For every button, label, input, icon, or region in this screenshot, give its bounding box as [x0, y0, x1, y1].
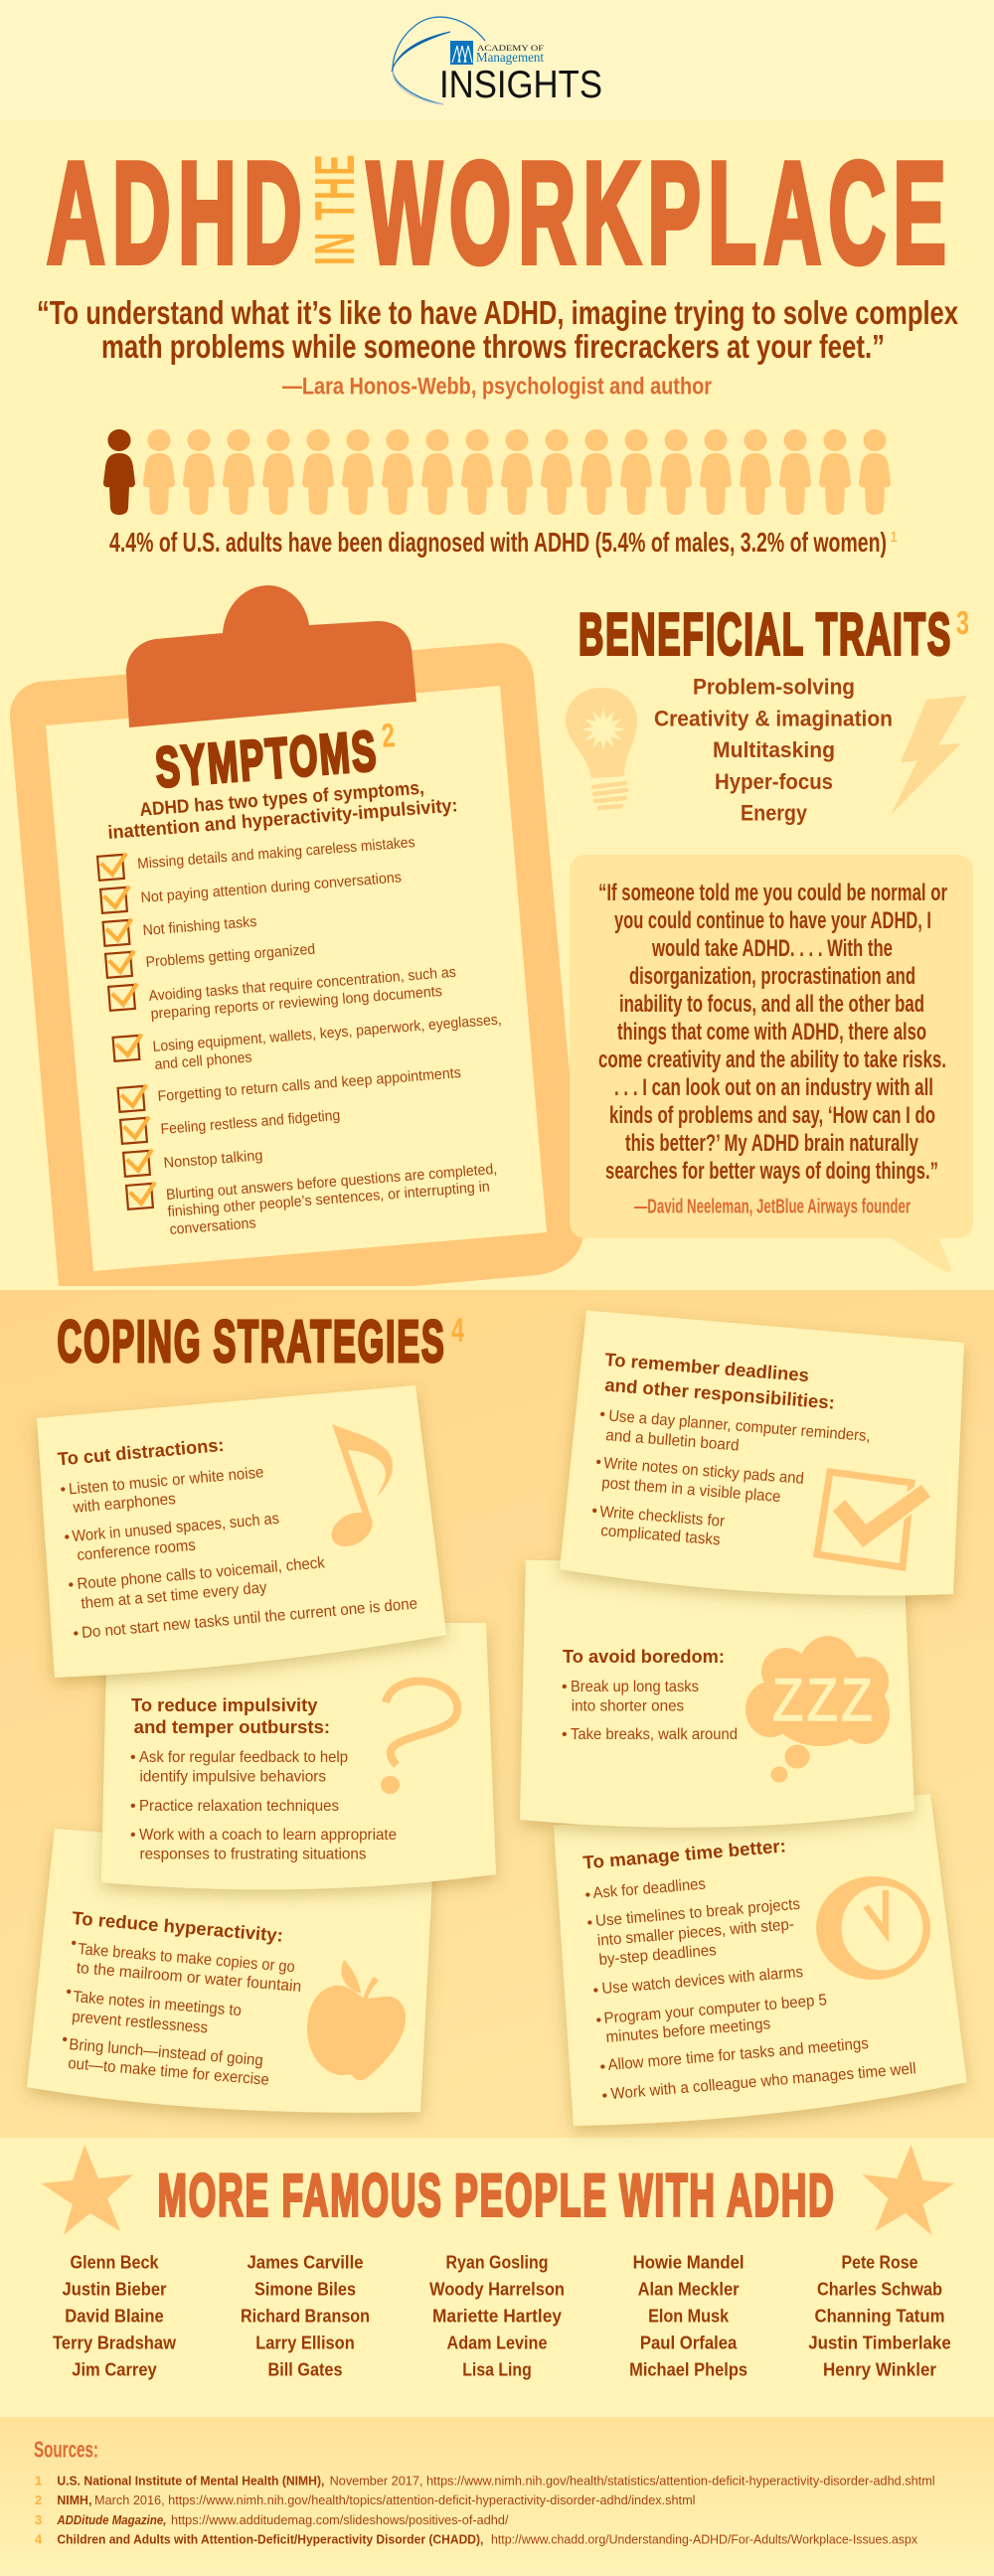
note: reduce impulsivity	[101, 1623, 496, 1889]
note: cut distractions: conference rooms	[77, 1537, 196, 1564]
section: coping strategies	[0, 1290, 994, 2138]
note: avoid boredom	[520, 1560, 914, 1828]
note: remember deadlines: •	[595, 1454, 602, 1471]
note: manage time: Work with a colleague who manages time well	[610, 2060, 916, 2103]
traits list: Problem-solving	[693, 674, 855, 700]
symptoms list: Blurting out answers before questions are completed,	[165, 1161, 498, 1204]
note: cut distractions	[37, 1385, 446, 1678]
source 1: U.S. National Institute of Mental Health (NIMH),	[57, 2474, 324, 2489]
icon: thought cloud	[746, 1636, 890, 1783]
traits list: Hyper-focus	[715, 769, 833, 794]
note: manage time: Use timelines to break projects	[594, 1896, 801, 1930]
title: ADHD in the workplace	[47, 132, 953, 293]
note: reduce hyperactivity: To reduce hyperactivity:	[72, 1907, 284, 1946]
source 4	[35, 2532, 917, 2547]
note: reduce impulsivity: Practice relaxation techniques	[139, 1798, 339, 1815]
note: manage time: •	[601, 2088, 608, 2105]
note: manage time: Use watch devices with alarms	[601, 1964, 804, 1998]
names column 1: Terry Bradshaw	[53, 2334, 177, 2353]
note: manage time: Program your computer to beep 5	[603, 1992, 828, 2027]
quote attribution: —Lara Honos-Webb, psychologist and author	[282, 374, 712, 400]
source 2: NIMH,	[57, 2493, 91, 2507]
names column 4	[629, 2253, 747, 2380]
icon: lightning bolt	[891, 696, 967, 815]
symptoms list: and cell phones	[154, 1048, 252, 1073]
names column 1: David Blaine	[65, 2307, 164, 2327]
names column 2	[241, 2253, 370, 2380]
note: remember deadlines: post them in a visible place	[601, 1475, 781, 1506]
note: remember deadlines: and other responsibilities:	[604, 1374, 836, 1413]
names column 5: Charles Schwab	[817, 2280, 942, 2300]
note: cut distractions: them at a set time every day	[81, 1579, 267, 1612]
source 4: http://www.chadd.org/Understanding-ADHD/For-Adults/Workplace-Issues.aspx	[491, 2532, 917, 2547]
note: remember deadlines: •	[591, 1503, 598, 1520]
note: reduce hyperactivity: •	[62, 2031, 69, 2048]
heading: symptoms: 2	[381, 717, 397, 755]
note: manage time: by-step deadlines	[598, 1942, 717, 1969]
icon: large checkbox	[817, 1472, 930, 1567]
heading: coping strategies	[58, 1309, 464, 1374]
logo: Academy of Management Insights: INSIGHTS	[439, 64, 602, 106]
note: remember deadlines: To remember deadlines	[604, 1349, 810, 1385]
heading: symptoms: SYMPTOMS	[153, 720, 380, 800]
symptoms list	[137, 834, 502, 1238]
note: manage time: Ask for deadlines	[592, 1876, 706, 1902]
note: reduce hyperactivity: out—to make time for exercise	[68, 2055, 269, 2089]
title: ADHD in the workplace: ADHD	[47, 132, 309, 293]
note: manage time: •	[584, 1887, 591, 1904]
source 4: 4	[35, 2532, 43, 2547]
note: manage time: into smaller pieces, with step-	[596, 1916, 795, 1950]
note: manage time: •	[595, 2012, 602, 2029]
symptoms list: Losing equipment, wallets, keys, paperwork, eyeglasses,	[152, 1011, 502, 1055]
names column 5: Henry Winkler	[823, 2360, 936, 2380]
icon: left star	[42, 2145, 133, 2235]
traits list	[654, 674, 893, 825]
note: manage time: •	[586, 1915, 593, 1932]
note: reduce hyperactivity: prevent restlessness	[72, 2009, 209, 2036]
symptoms list: Not paying attention during conversations	[140, 869, 403, 906]
traits list: Multitasking	[713, 737, 835, 762]
note: cut distractions: Work in unused spaces, such as	[72, 1511, 280, 1545]
note: remember deadlines: and a bulletin board	[605, 1427, 740, 1455]
source 2: March 2016, https://www.nimh.nih.gov/health/topics/attention-deficit-hyperactivity-disorder-adhd/index.shtml	[94, 2493, 696, 2507]
source 3: 3	[35, 2512, 42, 2527]
note: reduce impulsivity: •	[130, 1749, 136, 1766]
names column 5: Channing Tatum	[815, 2307, 944, 2327]
logo: Academy of Management Insights	[392, 17, 602, 106]
pictogram: 1 in 20 people	[103, 429, 891, 515]
names column 4: Elon Musk	[648, 2307, 730, 2327]
names column 2: Larry Ellison	[255, 2334, 355, 2353]
names column 1: Glenn Beck	[70, 2253, 159, 2273]
note: reduce hyperactivity: Take notes in meetings to	[73, 1989, 243, 2019]
symptoms list: Missing details and making careless mistakes	[137, 834, 415, 873]
symptoms subheading: inattention and hyperactivity-impulsivity:	[107, 795, 458, 844]
note: reduce impulsivity: To reduce impulsivity	[131, 1694, 318, 1715]
icon: music note	[325, 1424, 393, 1553]
Neeleman quote	[598, 880, 947, 1218]
names column 2: Richard Branson	[241, 2307, 370, 2327]
note: reduce hyperactivity	[27, 1829, 433, 2113]
note: reduce impulsivity: •	[130, 1827, 136, 1844]
note: reduce impulsivity: identify impulsive behaviors	[139, 1769, 326, 1785]
symptoms list: Avoiding tasks that require concentration, such as	[148, 964, 456, 1005]
note: manage time: Allow more time for tasks and meetings	[607, 2035, 869, 2074]
note: reduce hyperactivity: Bring lunch—instead of going	[69, 2036, 263, 2069]
note: manage time: minutes before meetings	[605, 2015, 771, 2046]
names column 4: Howie Mandel	[633, 2253, 745, 2273]
names column 3: Mariette Hartley	[432, 2307, 562, 2327]
icon: apple	[307, 1960, 406, 2080]
names column 2: Simone Biles	[254, 2280, 356, 2300]
source 3: https://www.additudemag.com/slideshows/positives-of-adhd/	[171, 2512, 509, 2527]
note: manage time: •	[599, 2059, 606, 2076]
names column 3	[429, 2253, 565, 2380]
note: remember deadlines: Use a day planner, computer reminders,	[608, 1408, 871, 1445]
panel: symptoms clipboard	[10, 585, 583, 1286]
sources heading: Sources:	[34, 2437, 98, 2463]
symptoms list: Not finishing tasks	[142, 913, 257, 939]
names column 4: Alan Meckler	[638, 2280, 740, 2300]
names column 2: James Carville	[247, 2253, 364, 2273]
names column 3: Woody Harrelson	[429, 2280, 565, 2300]
note: reduce impulsivity: and temper outbursts:	[134, 1716, 330, 1737]
note: reduce impulsivity: Ask for regular feedback to help	[139, 1749, 348, 1766]
note: remember deadlines: Write notes on sticky pads and	[603, 1455, 804, 1488]
source 3: ADDitude Magazine,	[57, 2512, 166, 2527]
names column 2: Bill Gates	[268, 2360, 342, 2380]
note: reduce impulsivity: Work with a coach to learn appropriate	[139, 1827, 397, 1844]
clipboard clip	[126, 585, 416, 727]
coping section background	[0, 1290, 994, 2138]
names column 4: Paul Orfalea	[640, 2334, 738, 2353]
note: cut distractions: To cut distractions:	[57, 1434, 225, 1469]
section: more famous people	[42, 2145, 954, 2380]
icon: question mark	[381, 1682, 457, 1794]
note: avoid boredom: •	[562, 1726, 568, 1743]
section: sources	[34, 2437, 935, 2547]
note: cut distractions: •	[60, 1482, 67, 1499]
source 1	[35, 2474, 935, 2489]
note: reduce impulsivity: •	[130, 1798, 136, 1815]
note: avoid boredom: To avoid boredom:	[563, 1646, 725, 1667]
note: cut distractions: with earphones	[72, 1491, 176, 1517]
clipboard paper	[46, 686, 547, 1271]
icon: thought cloud: ZZZ	[772, 1667, 876, 1733]
names column 3: Ryan Gosling	[445, 2253, 549, 2273]
names column 3: Adam Levine	[447, 2334, 547, 2353]
note: manage time: To manage time better:	[582, 1835, 787, 1872]
heading: coping strategies: 4	[451, 1312, 464, 1350]
note: manage time	[554, 1794, 967, 2126]
names column 5: Justin Timberlake	[808, 2334, 951, 2353]
note: cut distractions: Do not start new tasks until the current one is done	[81, 1595, 418, 1642]
symptoms list: preparing reports or reviewing long documents	[150, 983, 442, 1023]
note: cut distractions: •	[68, 1577, 75, 1594]
Neeleman quote: would take ADHD. . . . With the	[651, 935, 893, 962]
note: cut distractions: •	[64, 1530, 71, 1546]
note: avoid boredom: into shorter ones	[572, 1697, 684, 1714]
note: avoid boredom: Break up long tasks	[571, 1679, 699, 1695]
names column 3: Lisa Ling	[462, 2360, 532, 2380]
note: cut distractions: Route phone calls to voicemail, check	[77, 1554, 326, 1593]
symptoms list: Forgetting to return calls and keep appointments	[157, 1064, 461, 1105]
note: avoid boredom: •	[562, 1679, 568, 1695]
note: remember deadlines: complicated tasks	[600, 1523, 721, 1548]
note: reduce hyperactivity: •	[71, 1935, 78, 1952]
speech bubble	[570, 855, 973, 1272]
note: remember deadlines: Write checklists for	[599, 1504, 726, 1530]
note: cut distractions: •	[73, 1626, 80, 1643]
note: reduce hyperactivity: •	[66, 1984, 73, 2001]
headline quote	[37, 295, 958, 400]
traits list: Energy	[741, 801, 808, 825]
source 1: 1	[35, 2474, 42, 2489]
icon: clock	[816, 1876, 930, 1980]
note: avoid boredom: Take breaks, walk around	[571, 1726, 738, 1743]
names column 5	[808, 2253, 951, 2380]
symptoms list: Problems getting organized	[145, 941, 316, 971]
traits list: Creativity & imagination	[654, 706, 893, 731]
source 4: Children and Adults with Attention-Deficit/Hyperactivity Disorder (CHADD),	[57, 2532, 483, 2547]
note: manage time: •	[592, 1983, 599, 2000]
note: remember deadlines: •	[599, 1406, 606, 1423]
panel: beneficial traits	[566, 602, 973, 1272]
icon: light bulb	[566, 688, 637, 808]
note: reduce hyperactivity: to the mailroom or water fountain	[76, 1960, 302, 1996]
note: remember deadlines	[560, 1310, 964, 1596]
source 2: 2	[35, 2493, 42, 2507]
symptoms subheading: ADHD has two types of symptoms,	[139, 778, 425, 821]
statistic text: 1	[890, 529, 898, 546]
names column 1: Justin Bieber	[62, 2280, 167, 2300]
note: reduce impulsivity: responses to frustrating situations	[139, 1847, 366, 1862]
clipboard board	[10, 643, 583, 1286]
source 1: November 2017, https://www.nimh.nih.gov/health/statistics/attention-deficit-hyperactivity-disorder-adhd.shtml	[330, 2474, 935, 2489]
symptoms list: Nonstop talking	[163, 1147, 263, 1172]
logo: Academy of Management Insights: Management	[476, 51, 544, 66]
names column 1: Jim Carrey	[72, 2360, 157, 2380]
note: cut distractions: Listen to music or white noise	[68, 1464, 264, 1498]
heading: coping strategies: COPING STRATEGIES	[58, 1309, 446, 1374]
logo: Academy of Management Insights: ACADEMY OF	[477, 44, 545, 53]
names column 1	[53, 2253, 177, 2380]
symptoms list: finishing other people’s sentences, or interrupting in	[167, 1179, 490, 1220]
names column 5: Pete Rose	[841, 2253, 918, 2273]
title: ADHD in the workplace: IN THE	[303, 153, 367, 265]
symptoms list: Feeling restless and fidgeting	[160, 1107, 341, 1138]
checkboxes	[97, 854, 157, 1209]
heading: beneficial traits: 3	[956, 604, 969, 641]
symptoms list: conversations	[169, 1214, 256, 1238]
note: reduce hyperactivity: Take breaks to make copies or go	[78, 1941, 295, 1976]
heading: symptoms	[153, 717, 397, 800]
names column 4: Michael Phelps	[629, 2360, 747, 2380]
icon: right star	[863, 2145, 954, 2235]
